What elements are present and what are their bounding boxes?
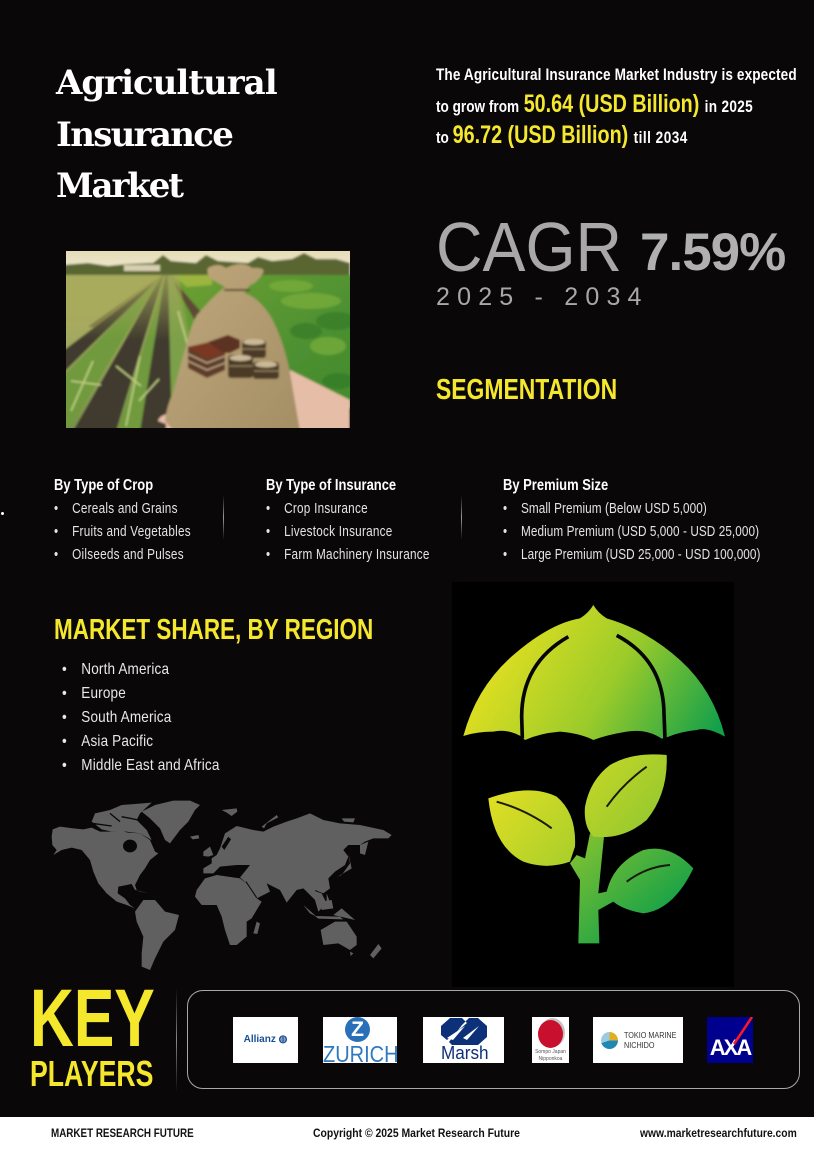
- logo: Tokio Marine Nichido: NICHIDO: [624, 1040, 655, 1050]
- title: Insurance: [56, 114, 232, 154]
- segmentation heading: SEGMENTATION: [436, 374, 617, 406]
- segment: by type of insurance: [266, 477, 430, 563]
- CAGR label: CAGR: [436, 208, 622, 286]
- segment: by type of crop: • Cereals and Grains: [54, 501, 178, 517]
- region list: • Asia Pacific: [62, 733, 153, 750]
- segment: by premium size: • Small Premium (Below USD 5,000): [503, 501, 707, 517]
- logo: Zurich: [323, 1017, 397, 1063]
- CAGR years: 2025 - 2034: [436, 283, 649, 311]
- segment: by type of insurance: • Farm Machinery Insurance: [266, 547, 430, 563]
- segment: by type of crop: • Fruits and Vegetables: [54, 524, 191, 540]
- market growth statement: [436, 65, 797, 149]
- footer: copyright: Copyright © 2025 Market Research Future: [313, 1126, 520, 1140]
- CAGR figure: [436, 208, 785, 286]
- logo: AXA: [707, 1017, 753, 1063]
- footer: [0, 1117, 814, 1150]
- region list: • South America: [62, 709, 171, 726]
- logo: Marsh: [423, 1017, 504, 1063]
- title: Market: [56, 166, 182, 206]
- logo: Allianz: Allianz ◍: [244, 1034, 287, 1045]
- footer: brand: MARKET RESEARCH FUTURE: [51, 1126, 194, 1140]
- region list: • North America: [62, 661, 169, 678]
- logo: Marsh: Marsh: [441, 1043, 489, 1063]
- segment: by type of insurance: • Crop Insurance: [266, 501, 368, 517]
- market growth statement: The Agricultural Insurance Market Industry is expected: [436, 65, 797, 84]
- illustration: umbrella over plant: [452, 582, 734, 987]
- segment: by premium size: • Medium Premium (USD 5,000 - USD 25,000): [503, 524, 759, 540]
- region list: • Middle East and Africa: [62, 757, 220, 774]
- market growth statement: to grow from 50.64 (USD Billion) in 2025: [436, 91, 753, 118]
- world map: [52, 800, 392, 970]
- logo: AXA: AXA: [710, 1035, 750, 1060]
- logo: Tokio Marine Nichido: [593, 1017, 683, 1063]
- region list: • Europe: [62, 685, 126, 702]
- panel: key player logos: [187, 990, 800, 1089]
- title: [56, 63, 277, 206]
- key: KEY: [30, 973, 155, 1064]
- players: PLAYERS: [30, 1053, 153, 1094]
- CAGR value: 7.59%: [640, 223, 785, 282]
- market growth statement: to 96.72 (USD Billion) till 2034: [436, 122, 688, 149]
- segment: by type of insurance: • Livestock Insurance: [266, 524, 393, 540]
- footer: website: www.marketresearchfuture.com: [640, 1126, 797, 1140]
- logo: Sompo Japan Nipponkoa: [532, 1017, 569, 1063]
- market share heading: MARKET SHARE, BY REGION: [54, 614, 373, 646]
- segment: by type of crop: • Oilseeds and Pulses: [54, 547, 184, 563]
- segment: by premium size: By Premium Size: [503, 477, 608, 494]
- segment: by type of crop: By Type of Crop: [54, 477, 153, 494]
- region list: [62, 661, 220, 774]
- illustration: money bag in crop field: [66, 251, 350, 428]
- segment: by type of crop: [54, 477, 191, 563]
- segmentation columns: [54, 477, 761, 563]
- logo: Allianz: [233, 1017, 298, 1063]
- segment: by premium size: • Large Premium (USD 25,000 - USD 100,000): [503, 547, 761, 563]
- segment: by premium size: [503, 477, 761, 563]
- segment: by type of insurance: By Type of Insurance: [266, 477, 396, 494]
- key players label: [30, 973, 155, 1094]
- logo: Sompo Japan Nipponkoa: Sompo Japan Nipponkoa: [535, 1049, 566, 1062]
- logo: Zurich: Z: [351, 1018, 364, 1041]
- title: Agricultural: [56, 63, 277, 103]
- logo: Tokio Marine Nichido: TOKIO MARINE: [624, 1030, 676, 1040]
